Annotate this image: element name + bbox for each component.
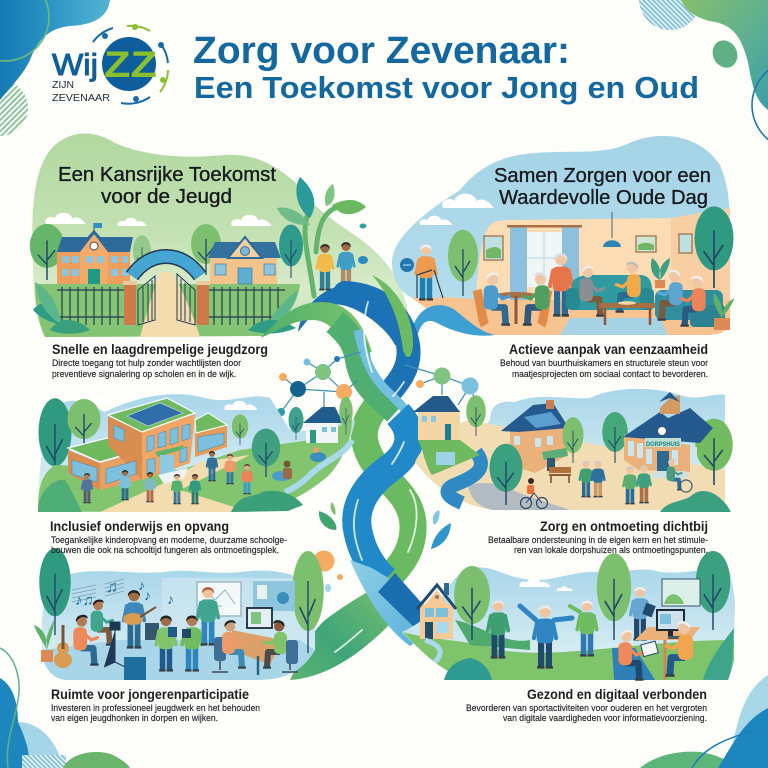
music notes and staves xyxy=(72,577,174,609)
bushes bottom right xyxy=(660,491,731,512)
reading children xyxy=(272,460,292,481)
panel: school illustration xyxy=(38,394,355,512)
elder with walker outside xyxy=(400,230,495,335)
room interior xyxy=(470,208,730,335)
title: Een Toekomst voor Jong en Oud xyxy=(194,70,699,105)
walking elder xyxy=(488,600,508,659)
logo: Wij Zijn Zevenaar: ZZ xyxy=(104,44,157,85)
potted plant right xyxy=(713,293,734,330)
tree: left of school xyxy=(30,224,64,280)
clouds: school panel xyxy=(81,396,257,410)
panel: youth future illustration xyxy=(30,133,412,355)
wall poster xyxy=(253,581,295,611)
path through gate xyxy=(140,272,200,337)
modern school building xyxy=(68,398,227,490)
green meadow xyxy=(403,632,734,680)
text block: eenzaamheid: Actieve aanpak van eenzaamheid xyxy=(509,342,708,357)
back room wall xyxy=(162,578,300,660)
school building right xyxy=(208,237,281,284)
speaker and amp xyxy=(124,623,159,680)
decoration: top left corner shapes xyxy=(0,0,110,136)
music notes and staves: ♪ xyxy=(167,591,174,607)
green hill xyxy=(455,620,530,650)
tree: playground xyxy=(252,429,280,477)
text block: eenzaamheid: maatjesprojecten om sociaal contact to bevorderen. xyxy=(512,369,708,380)
heading: elderly: Waardevolle Oude Dag xyxy=(499,187,708,209)
text block: jongerenparticipatie xyxy=(51,687,260,724)
title: Zorg voor Zevenaar: xyxy=(193,30,570,72)
network icons: left xyxy=(277,352,361,416)
tree: behind gate xyxy=(191,224,221,275)
text block: jeugdzorg xyxy=(52,342,268,380)
network icons: right xyxy=(405,365,478,408)
text block: eenzaamheid: Behoud van buurthuiskamers en structurele steun voor xyxy=(500,358,708,369)
text block: jongerenparticipatie: Investeren in professioneel jeugdwerk en het behouden xyxy=(51,703,260,714)
whiteboard xyxy=(197,582,241,616)
table group with seated elders xyxy=(477,272,549,326)
Dorpshuis building xyxy=(623,392,713,478)
tree group: behind school xyxy=(38,398,248,485)
school building left xyxy=(57,223,133,284)
trees xyxy=(39,548,324,653)
blue stream xyxy=(447,452,481,503)
bench xyxy=(549,467,571,483)
small riverside house xyxy=(413,395,486,475)
text block: zorg en ontmoeting: Zorg en ontmoeting dichtbij xyxy=(540,519,708,534)
decoration: bottom right corner shapes xyxy=(640,675,768,768)
bushes xyxy=(38,480,303,512)
trees xyxy=(454,551,730,640)
blue hill with children xyxy=(298,224,412,345)
text block: onderwijs xyxy=(50,519,287,556)
text block: gezond en digitaal: Bevorderen van sportactiviteiten voor ouderen en het vergroten xyxy=(466,703,707,714)
logo: Wij Zijn Zevenaar xyxy=(52,24,168,104)
panel: healthy and digital illustration xyxy=(402,551,735,681)
clouds: elderly panel xyxy=(419,194,493,225)
text block: jeugdzorg: Directe toegang tot hulp zonder wachtlijsten door xyxy=(52,358,241,369)
houseplant xyxy=(651,258,670,288)
two teens with tablets xyxy=(156,616,202,672)
title xyxy=(193,30,699,105)
sandy path xyxy=(100,455,250,512)
trees in village xyxy=(490,412,733,505)
seated elder with tablet xyxy=(612,630,658,681)
sprouting plant vine xyxy=(277,177,366,296)
ribbon: blue upper strand xyxy=(345,293,409,403)
tree: small behind left school xyxy=(133,235,151,276)
computer desk group xyxy=(212,608,298,675)
Dorpshuis building: DORPSHUIS xyxy=(646,441,681,448)
music notes and staves: ♫ xyxy=(106,579,118,596)
clouds: youth panel xyxy=(45,213,272,226)
ribbon: swoosh from youth panel xyxy=(260,302,372,352)
fence xyxy=(57,287,285,325)
text block: eenzaamheid xyxy=(500,342,708,380)
river xyxy=(285,440,352,492)
text block: onderwijs: bouwen die ook na schooltijd fungeren als ontmoetingsplek. xyxy=(51,545,279,556)
tablet held by elder xyxy=(642,603,656,617)
residents in conversation xyxy=(580,459,692,504)
band musicians xyxy=(73,590,156,667)
house xyxy=(417,583,456,639)
text block: onderwijs: Toegankelijke kinderopvang en moderne, duurzame schoolge- xyxy=(51,535,287,546)
teacher at whiteboard xyxy=(198,587,218,646)
tree: small teal xyxy=(279,224,303,278)
text block: gezond en digitaal: Gezond en digitaal verbonden xyxy=(527,687,707,702)
text block: jongerenparticipatie: Ruimte voor jongerenparticipatie xyxy=(51,687,249,702)
elder woman exercising xyxy=(570,601,597,657)
music notes and staves: ♪ xyxy=(138,577,145,593)
small house and tree xyxy=(288,397,353,462)
heading: elderly: Samen Zorgen voor een xyxy=(494,165,711,187)
wall pictures xyxy=(484,234,692,260)
ribbon: green strand from hole two to crossing three xyxy=(364,400,413,590)
seated elder at computer xyxy=(665,621,693,677)
framed window xyxy=(662,579,700,606)
text block: zorg en ontmoeting: Betaalbare ondersteuning in de eigen kern en het stimule- xyxy=(488,535,708,546)
music notes and staves: ♪ xyxy=(144,587,151,603)
panel: youth participation illustration xyxy=(34,548,324,680)
ribbon: light blue edge on upper strand xyxy=(358,330,416,428)
ribbon: blue lower strand xyxy=(357,414,409,580)
ribbon: lower right band xyxy=(350,560,430,646)
coffee table xyxy=(599,301,656,325)
music notes and staves: ♪♫ xyxy=(75,592,94,609)
tai chi elder xyxy=(520,605,572,669)
tree: room right xyxy=(694,206,734,288)
house with solar roof xyxy=(501,400,569,473)
plant right xyxy=(703,628,734,680)
panel: elderly care illustration xyxy=(392,136,734,335)
loose leaves and dots in the centre xyxy=(314,502,451,592)
cyclist xyxy=(520,478,548,508)
desk with computer xyxy=(635,610,700,680)
sofa with two elders xyxy=(566,262,654,317)
hanging lamp xyxy=(603,212,621,247)
text block: jeugdzorg: Snelle en laagdrempelige jeugdzorg xyxy=(52,342,268,357)
ground xyxy=(35,284,300,337)
gate arch and leaves xyxy=(123,256,210,325)
ribbon: highlights xyxy=(335,302,417,652)
heading: youth: Een Kansrijke Toekomst xyxy=(58,164,276,186)
small stream xyxy=(425,640,440,662)
logo: Wij Zijn Zevenaar: ZEVENAAR xyxy=(52,93,110,104)
text block: zorg en ontmoeting xyxy=(488,519,708,556)
standing elder with tablet xyxy=(631,587,649,641)
floor xyxy=(42,640,315,680)
ribbon: leaf over top strand xyxy=(372,275,413,357)
window and curtains xyxy=(507,225,582,300)
ribbon: lower left band xyxy=(290,578,392,680)
clouds xyxy=(519,578,573,591)
heading: youth: voor de Jeugd xyxy=(101,186,232,208)
ribbon: green upper strand xyxy=(335,322,396,412)
village street xyxy=(415,420,725,510)
text block: gezond en digitaal xyxy=(466,687,707,724)
central twisted ribbon xyxy=(260,275,495,680)
plant and guitar left xyxy=(34,620,72,668)
right sofa with two elders xyxy=(655,270,725,327)
logo: Wij Zijn Zevenaar: ZIJN xyxy=(52,80,74,91)
panel: village centre illustration xyxy=(413,389,733,512)
bush left xyxy=(444,658,492,680)
text block: jongerenparticipatie: van eigen jeugdhonken in dorpen en wijken. xyxy=(51,713,218,724)
logo: Wij Zijn Zevenaar: Wij xyxy=(52,47,98,82)
text block: gezond en digitaal: van digitale vaardigheden voor informatievoorziening. xyxy=(503,713,707,724)
decoration: bottom left corner shapes xyxy=(0,648,130,768)
text block: onderwijs: Inclusief onderwijs en opvang xyxy=(50,519,229,534)
text block: zorg en ontmoeting: ren van lokale dorpshuizen als ontmoetingspunten. xyxy=(514,545,708,556)
heading: youth xyxy=(58,164,276,208)
heading: elderly xyxy=(494,165,711,209)
plants foreground xyxy=(33,282,298,334)
grey road xyxy=(468,483,570,510)
text block: jeugdzorg: preventieve signalering op scholen en in de wijk. xyxy=(52,369,236,380)
standing man with phone xyxy=(550,253,572,317)
decoration: top right corner shapes xyxy=(639,0,768,150)
ribbon: light blue arm to right panel xyxy=(412,305,495,340)
school grounds xyxy=(38,420,352,512)
children playing xyxy=(82,451,252,504)
